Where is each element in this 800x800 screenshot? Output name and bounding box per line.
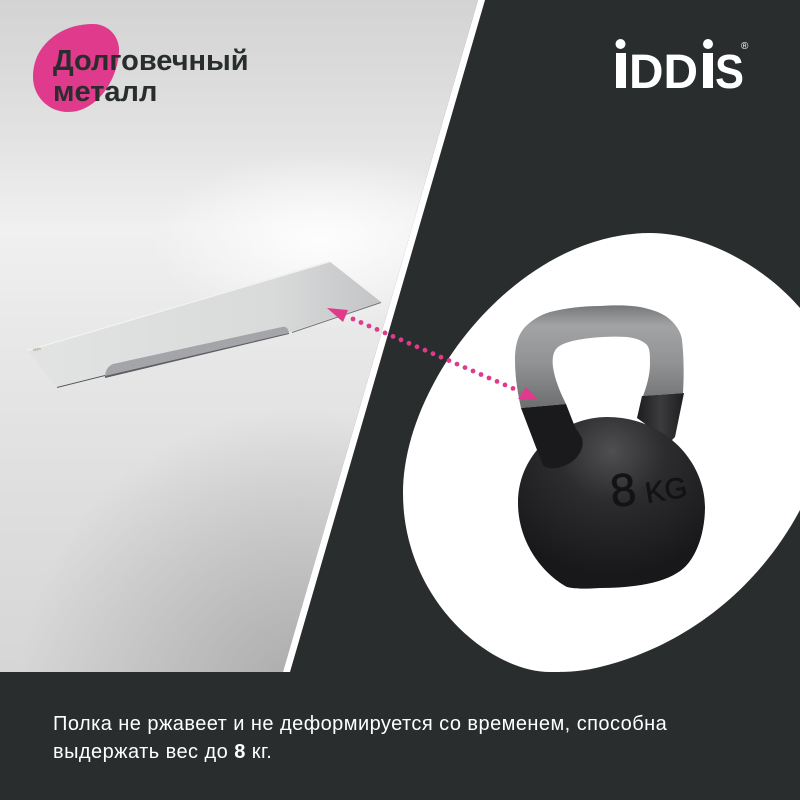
kettlebell left sleeve xyxy=(521,404,583,468)
caption xyxy=(53,713,667,763)
white oval xyxy=(403,233,800,672)
kettlebell weight label xyxy=(608,463,689,517)
kettlebell body xyxy=(518,417,705,589)
wall photo panel xyxy=(0,0,490,672)
shelf: iddis xyxy=(32,346,41,352)
white diagonal divider xyxy=(283,0,485,672)
kettlebell weight label: 8 xyxy=(608,463,638,517)
kettlebell handle xyxy=(515,305,684,408)
kettlebell right sleeve xyxy=(637,393,684,442)
title xyxy=(53,45,249,108)
kettlebell weight label: KG xyxy=(643,472,689,510)
logo: S xyxy=(715,46,744,99)
caption: выдержать вес до 8 кг. xyxy=(53,741,272,763)
caption: Полка не ржавеет и не деформируется со временем, способна xyxy=(53,713,667,735)
double-headed dotted arrow xyxy=(327,308,538,400)
title: металл xyxy=(53,76,157,108)
logo: ® xyxy=(741,41,749,52)
pink blob behind title xyxy=(33,24,119,112)
shelf xyxy=(27,261,381,388)
kettlebell xyxy=(515,305,705,589)
title: Долговечный xyxy=(53,45,249,77)
logo: DD xyxy=(629,46,698,99)
logo xyxy=(616,39,749,99)
